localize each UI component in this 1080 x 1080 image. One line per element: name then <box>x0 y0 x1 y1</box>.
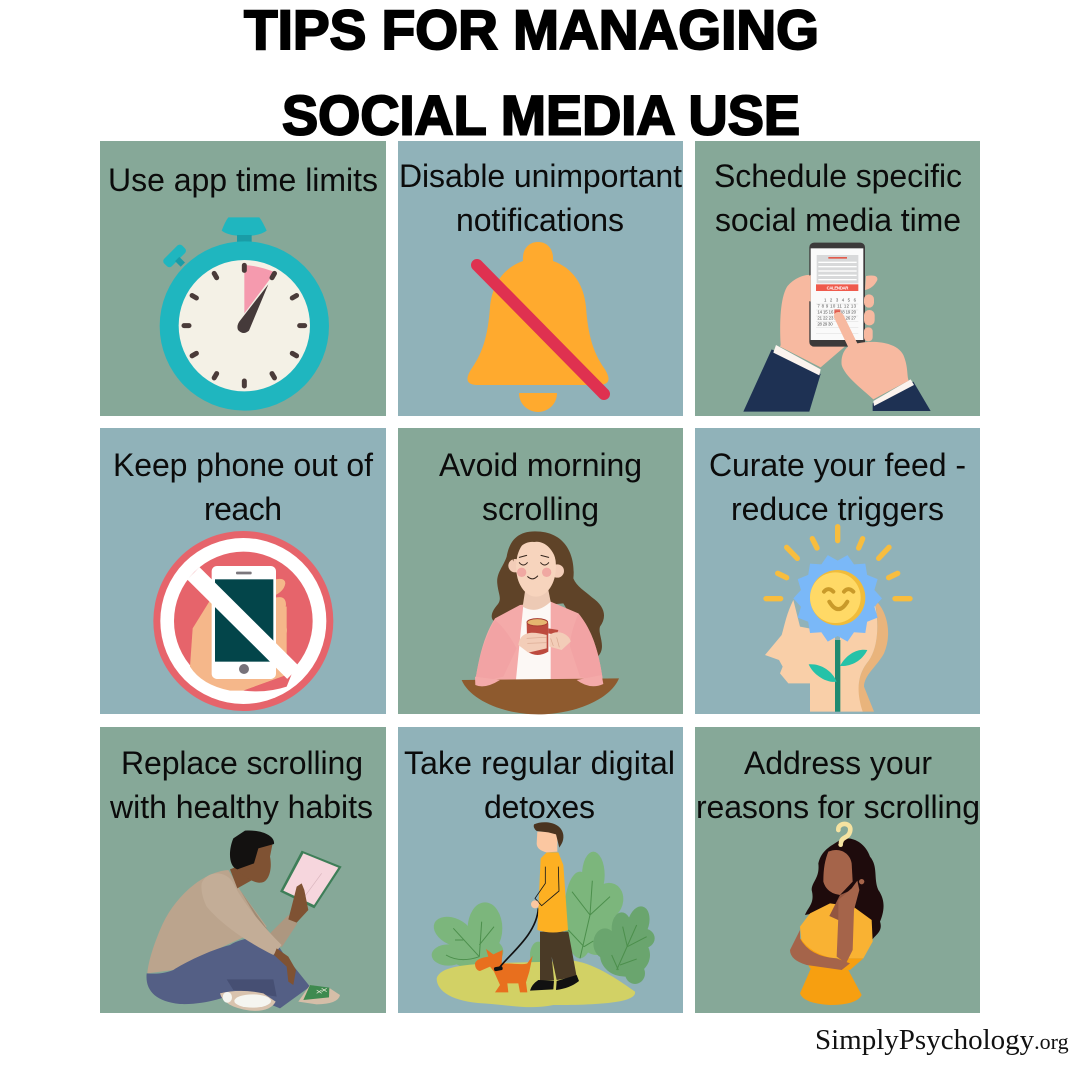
heading: keep phone out of reach <box>113 447 373 527</box>
panel: use app time limits <box>100 141 386 416</box>
heading: keep phone out of reach: Keep phone out of <box>113 447 373 483</box>
heading: avoid morning scrolling <box>439 447 642 527</box>
icon: hands holding phone with calendar: 21 22 23 24 25 26 27 <box>817 315 857 320</box>
icon: hands holding phone with calendar: CALENDAR <box>827 285 849 290</box>
icon: head with smiling flower <box>765 527 910 712</box>
heading: schedule specific social media time: Schedule specific <box>714 158 962 194</box>
panel: disable unimportant notifications <box>398 141 683 416</box>
panel: curate your feed <box>695 428 980 714</box>
panel: avoid morning scrolling <box>398 428 683 714</box>
heading: address your reasons for scrolling <box>696 745 980 825</box>
heading: schedule specific social media time <box>714 158 962 238</box>
title: SOCIAL MEDIA USE <box>282 84 800 146</box>
icon: stopwatch <box>160 217 329 411</box>
icon: person walking a dog <box>429 822 655 1007</box>
icon: thinking woman with question mark <box>790 824 884 1005</box>
icon: hands holding phone with calendar: 28 29 30 <box>817 322 833 327</box>
heading: address your reasons for scrolling: Address your <box>744 745 932 781</box>
heading: schedule specific social media time: social media time <box>715 202 961 238</box>
heading: replace scrolling with healthy habits: with healthy habits <box>109 789 373 825</box>
footer: source credit: SimplyPsychology.org <box>815 1024 1069 1056</box>
icon: hands holding phone with calendar: 7 8 9 10 11 12 13 <box>817 304 857 309</box>
panel: take regular digital detoxes <box>398 727 683 1013</box>
icon: hands holding phone with calendar: 1 2 3 4 5 6 <box>824 298 857 303</box>
icon: man reading a book <box>146 831 342 1011</box>
panel: replace scrolling with healthy habits <box>100 727 386 1013</box>
panel: address your reasons for scrolling <box>695 727 980 1013</box>
heading: replace scrolling with healthy habits <box>109 745 373 825</box>
heading: use app time limits: Use app time limits <box>108 162 378 198</box>
panel: schedule specific social media time <box>695 141 980 416</box>
icon: woman with coffee <box>462 531 619 714</box>
panel: keep phone out of reach <box>100 428 386 714</box>
heading: disable unimportant notifications: Disable unimportant <box>399 158 682 194</box>
heading: curate your feed <box>709 447 966 527</box>
heading: avoid morning scrolling: Avoid morning <box>439 447 642 483</box>
heading: curate your feed: Curate your feed - <box>709 447 966 483</box>
icon: no phone sign <box>153 531 333 711</box>
heading: avoid morning scrolling: scrolling <box>482 491 599 527</box>
heading: take regular digital detoxes: detoxes <box>484 789 595 825</box>
heading: take regular digital detoxes: Take regular digital <box>404 745 675 781</box>
heading: take regular digital detoxes <box>404 745 675 825</box>
heading: address your reasons for scrolling: reasons for scrolling <box>696 789 980 825</box>
heading: curate your feed: reduce triggers <box>731 491 944 527</box>
icon: hands holding phone with calendar: 14 15 16 17 18 19 20 <box>817 309 857 314</box>
heading: keep phone out of reach: reach <box>204 491 282 527</box>
icon: hands holding phone with calendar <box>743 243 931 412</box>
title <box>244 0 819 146</box>
heading: disable unimportant notifications: notifications <box>456 202 624 238</box>
heading: disable unimportant notifications <box>399 158 682 238</box>
heading: replace scrolling with healthy habits: Replace scrolling <box>121 745 363 781</box>
icon: crossed-out bell <box>467 242 609 412</box>
